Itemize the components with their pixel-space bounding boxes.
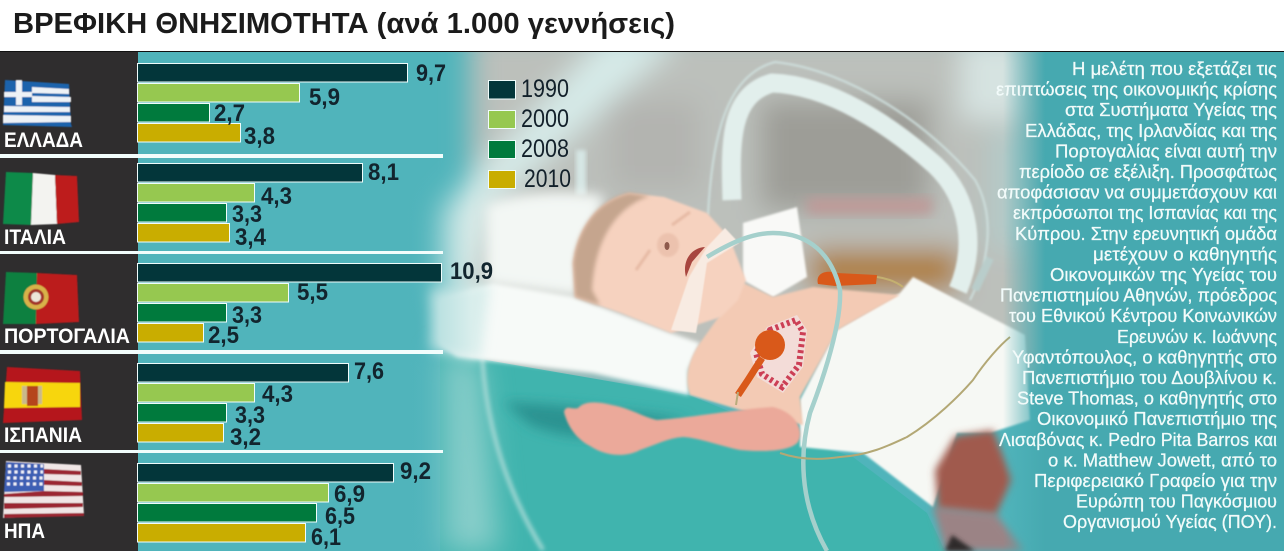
text block: study description: στα Συστήματα Υγείας της [1065,100,1277,120]
label: USA: ΗΠΑ [4,520,45,543]
flag: Spain [3,367,82,423]
wire [780,337,1010,459]
ECG pad and orange sensor [736,315,807,405]
text block: study description: του Εθνικού Κέντρου Κοινωνικών [1009,306,1277,326]
flag: Italy [3,172,79,225]
text block: study description: Οργανισμού Υγείας (ΠΟΥ). [1063,512,1277,532]
values: Italy: 8,1 [368,159,399,186]
arm [564,402,800,455]
legend [488,75,571,193]
text block: study description: Υφαντόπουλος, ο καθηγητής στο [1012,347,1277,367]
label: Greece: ΕΛΛΑΔΑ [4,129,83,152]
row: Greece [3,60,446,152]
torso [687,283,900,425]
top rule [0,51,1284,52]
legend: 2000 [521,105,569,133]
text block: study description: επιπτώσεις της οικονομικής κρίσης [996,80,1277,100]
flag: USA [3,461,84,518]
text block: study description: Ελλάδας, της Ιρλανδίας και της [1025,121,1277,141]
values: Portugal [208,258,493,349]
values: Greece: 5,9 [309,84,340,111]
flag: Greece [3,80,72,127]
text block: study description: Steve Thomas, ο καθηγητής στο [1017,389,1277,409]
country label panel [0,52,138,551]
text block: study description: Οικονομικών της Υγείας του [1050,265,1277,285]
legend: 1990 [521,75,569,103]
text block: study description: Κύπρου. Στην ερευνητική ομάδα [1015,224,1277,244]
row: USA [3,458,431,551]
values: Portugal: 2,5 [208,322,239,349]
values: Greece [214,60,446,150]
values: Italy [232,159,399,251]
values: Greece: 2,7 [214,100,245,127]
text block: study description: ο κ. Matthew Jowett, από το [1048,450,1277,470]
text block: study description: μετέχουν ο καθηγητής [1093,244,1277,264]
text block: study description [996,59,1277,532]
bars: Portugal [138,264,442,342]
row: Portugal [3,258,493,349]
chest sensor [818,272,877,286]
flag: Portugal [3,272,79,324]
text block: study description: Πορτογαλίας είναι αυτή την [1055,141,1277,161]
leg [935,430,1012,516]
label: Italy: ΙΤΑΛΙΑ [4,226,66,249]
bars: USA [138,464,394,542]
row separators [0,154,443,453]
text block: study description: εκπρόσωποι της Ισπανίας και της [1013,203,1277,223]
values: Greece: 9,7 [416,60,446,87]
values: USA: 6,9 [334,481,365,508]
values: Spain: 7,6 [354,358,384,385]
sheet [440,352,945,551]
bars: Spain [138,364,348,442]
label: Portugal: ΠΟΡΤΟΓΑΛΙΑ [4,325,130,348]
values: Italy: 3,4 [235,224,267,251]
values: Spain: 4,3 [262,381,293,408]
medical tape [671,228,739,333]
values: Spain: 3,3 [235,402,265,429]
text block: study description: περίοδο σε εξέλιξη. Προσφάτως [1019,162,1277,182]
title: ΒΡΕΦΙΚΗ ΘΝΗΣΙΜΟΤΗΤΑ (ανά 1.000 γεννήσεις) [13,8,675,40]
values: Portugal: 5,5 [297,279,328,306]
fades [424,196,464,358]
bars: Italy [138,164,362,242]
legend: 2010 [524,165,571,193]
values: Italy: 4,3 [261,183,292,210]
values: USA: 6,5 [325,503,355,530]
row: Spain [3,358,384,451]
values: Greece: 3,8 [244,123,275,150]
text block: study description: Πανεπιστημίου Αθηνών, πρόεδρος [1000,286,1277,306]
values: Portugal: 3,3 [232,302,262,329]
diaper behind arm [800,277,1030,507]
text block: study description: Πανεπιστήμιο του Δουβλίνου κ. [1022,368,1277,388]
text block: study description: αποφάσισαν να συμμετάσχουν και [997,183,1277,203]
values: USA [311,458,431,551]
label: Spain: ΙΣΠΑΝΙΑ [4,424,82,447]
values: Portugal: 10,9 [450,258,493,285]
pillows [486,192,604,297]
row: Italy [3,159,399,251]
values: Spain: 3,2 [230,424,261,451]
values: USA: 6,1 [311,524,341,551]
values: Italy: 3,3 [232,201,262,228]
values: Spain [230,358,384,451]
legend: 2008 [521,135,569,163]
text block: study description: Η μελέτη που εξετάζει τις [1072,59,1277,79]
text block: study description: Ευρώπη του Παγκόσμιου [1076,492,1277,512]
head [573,193,746,333]
text block: study description: Οικονομικό Πανεπιστήμιο της [1037,409,1277,429]
IV tube [707,233,840,551]
text block: study description: Λισαβόνας κ. Pedro Pita Barros και [999,430,1277,450]
text block: study description: Περιφερειακό Γραφείο για την [1034,471,1277,491]
text block: study description: Ερευνών κ. Ιωάννης [1117,327,1277,347]
values: USA: 9,2 [400,458,431,485]
bars: Greece [138,64,408,142]
incubator hoop [708,62,990,300]
background inside incubator [440,30,1070,380]
